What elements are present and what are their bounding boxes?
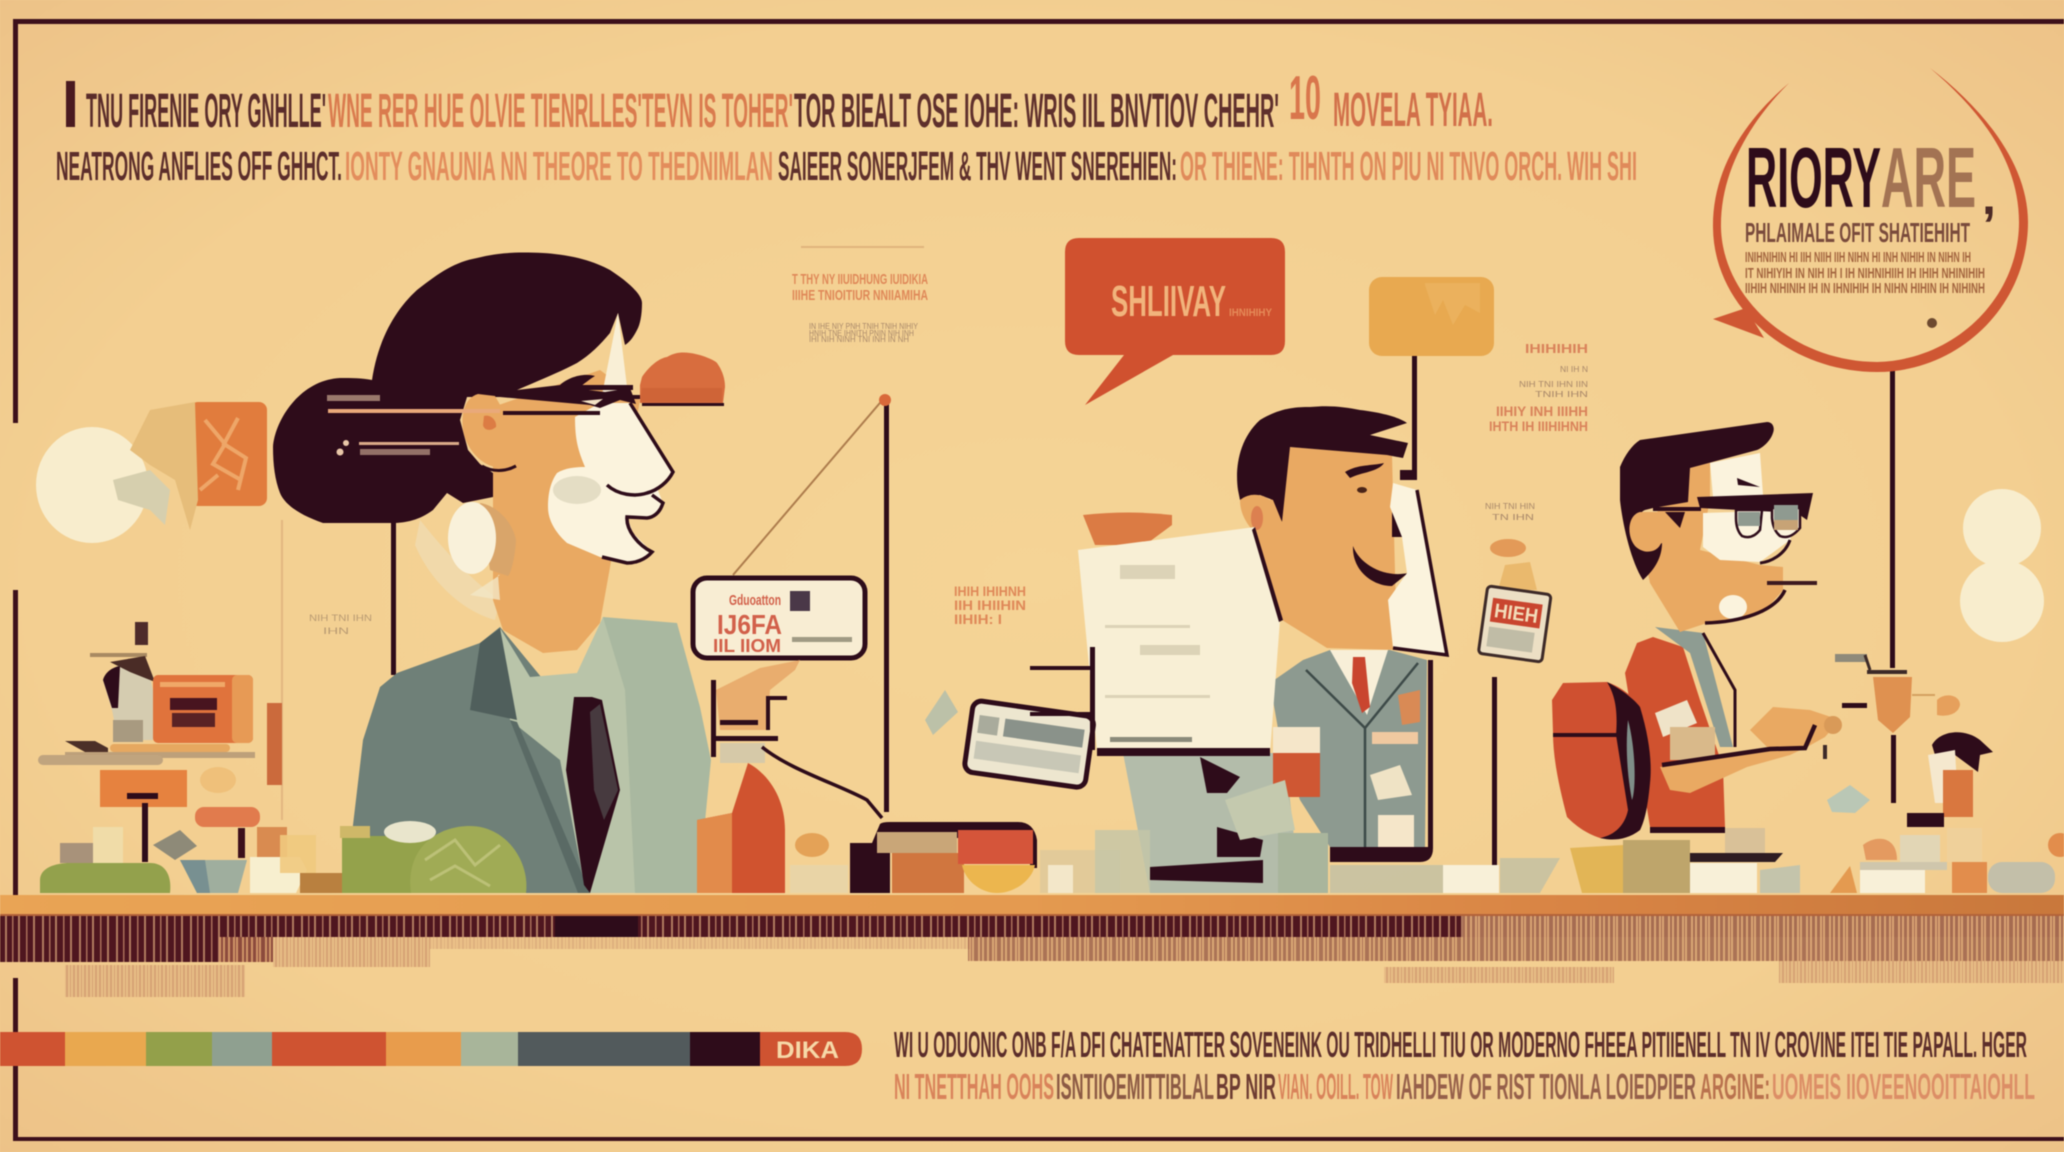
young man figure	[1552, 422, 1842, 893]
young man: mask top	[1710, 453, 1763, 497]
callout title: RIORY	[1746, 131, 1881, 226]
small text cluster: right of amber sign: IHTH IH IIIHIHNH	[1489, 418, 1588, 434]
bottom line 2: ARGINE:	[1700, 1066, 1770, 1107]
orange radio	[153, 675, 253, 743]
callout body	[1745, 249, 1985, 297]
young man: backpack	[1552, 682, 1651, 839]
tablet: woman: IIL IIOM	[713, 636, 781, 656]
colour legend strip	[0, 1032, 862, 1066]
small text cluster: right of amber sign: NIH TNI HIN	[1485, 502, 1535, 511]
woman: earring background	[415, 520, 500, 620]
circle callout with pole	[1713, 68, 2028, 803]
callout tail	[1713, 308, 1764, 338]
legend label: DIKA	[776, 1037, 839, 1064]
white circles right	[1960, 489, 2044, 642]
heading line 1: TOR BIEALT OSE IOHE: WRIS IIL BNVTIOV CHEHR'	[794, 85, 1279, 138]
bottom line 2: ISNTIIOEMITTIBLAL	[1056, 1066, 1214, 1107]
man: papers	[1078, 527, 1280, 753]
bottom line 2: BP NIR	[1216, 1066, 1276, 1107]
barcode row 1	[0, 916, 1463, 937]
tiny figure	[1827, 732, 1993, 827]
funnel and tool	[1835, 654, 1960, 733]
left desk objects	[38, 622, 342, 893]
heading line 1: WNE RER HUE OLVIE TIENRLLES'TEVN IS TOHER'	[328, 85, 793, 138]
man: jacket	[1270, 650, 1427, 847]
faint note: IHN	[323, 626, 349, 636]
woman: glasses	[503, 411, 600, 415]
barcode row 2	[0, 937, 219, 962]
bottle: body	[697, 763, 785, 893]
bottle: cable	[762, 747, 882, 818]
bottom right desk objects	[1570, 828, 2064, 893]
man: dark shapes on trousers	[1200, 757, 1240, 793]
speech bubble: SHLIIVAY: IHNIHIHY	[1229, 307, 1273, 319]
small text cluster: right of amber sign: TN IHN	[1492, 513, 1534, 522]
man: leaf	[925, 690, 958, 735]
small text cluster: right of amber sign: IIHIY INH IIIHH	[1496, 403, 1588, 419]
red text note	[954, 583, 1026, 627]
man: trousers	[1123, 753, 1300, 893]
tablet: woman	[693, 578, 865, 658]
woman: hair	[273, 253, 642, 523]
bird	[153, 830, 197, 860]
bottle: stand	[711, 680, 716, 757]
man: cup	[1273, 727, 1320, 754]
circle callout with pole: ,	[1982, 169, 1996, 225]
man: nose shadow	[1392, 510, 1403, 537]
bottom text block	[894, 1024, 2035, 1107]
green vegetable	[40, 863, 170, 893]
figurine	[103, 665, 153, 740]
small text cluster: above tablet	[792, 246, 928, 344]
speech bubble: SHLIIVAY	[1065, 238, 1285, 405]
man: white nose panel	[1388, 483, 1447, 655]
heading line 2	[56, 143, 1637, 189]
small card on pole	[1443, 539, 1551, 893]
woman: lapel	[470, 628, 517, 720]
man with paper figure	[925, 406, 1447, 893]
red bottle and stand	[697, 660, 882, 893]
heading line 1	[66, 64, 1493, 138]
barcode row 3	[65, 965, 245, 997]
woman: face mask	[548, 403, 673, 563]
tablet: woman: IJ6FA	[717, 609, 782, 640]
man: ear	[1240, 495, 1282, 545]
small text cluster: above tablet: IN IHE NIY PNH TNIH TNIH NIHIY	[809, 322, 919, 331]
young man: neck and face	[1643, 462, 1783, 632]
young man: mask lower	[1703, 510, 1800, 562]
small text cluster: above tablet: HNIH TNE IHNITH PNIN NIH INH	[809, 329, 914, 338]
orange cup behind paper	[1083, 512, 1172, 545]
woman: shirt	[500, 617, 635, 893]
orange box	[100, 770, 187, 807]
white circle decoration left	[36, 427, 148, 543]
man: eye and brow	[1345, 463, 1384, 478]
man: shirt and tie	[1330, 650, 1388, 715]
small text cluster: right of amber sign: IHIHIHIH	[1525, 341, 1588, 356]
speech bubble: SHLIIVAY: SHLIIVAY	[1111, 277, 1226, 326]
small text cluster: right of amber sign: NI IH N	[1560, 365, 1588, 374]
bottom line 2	[894, 1066, 2035, 1107]
heading line 2: SAIEER SONERJFEM & THV WENT SNEREHIEN:	[778, 143, 1177, 189]
young man: shirt	[1625, 637, 1725, 827]
orange post	[267, 703, 282, 785]
young man: glasses	[1697, 493, 1813, 520]
young man: trousers	[1623, 840, 1690, 893]
red text note: IHIH IHIHNH	[954, 583, 1026, 599]
amber sign on pole	[1369, 277, 1494, 480]
man: jacket dark edge	[1330, 660, 1433, 862]
small text cluster: above tablet: IHI NIH NINH TNI INH IN NH	[809, 335, 909, 344]
small text cluster: right of amber sign: NIH TNI IHN IIN	[1519, 380, 1588, 389]
man: hair	[1237, 406, 1408, 522]
bottom line 2: NI TNETTHAH OOHS	[894, 1066, 1054, 1107]
shelf	[65, 752, 255, 758]
small text cluster: above tablet: IIIHE TNIOITIUR NNIIAMIHA	[792, 287, 928, 304]
grey items	[60, 843, 93, 863]
ring	[1713, 68, 2028, 372]
man: pocket details	[1372, 732, 1418, 744]
woman: neck and face	[493, 370, 640, 653]
heading line 1: TNU FIRENIE ORY GNHLLE'	[86, 85, 326, 138]
woman figure	[273, 253, 725, 893]
heading line 2: IONTY GNAUNIA NN THEORE TO THEDNIMLAN	[345, 143, 773, 189]
man: neck and face	[1257, 447, 1397, 650]
woman: tie	[566, 697, 620, 893]
counter bar	[0, 895, 2064, 914]
small text cluster: above tablet: T THY NY IIUIDHUNG IUIDIKIA	[792, 271, 928, 288]
young man: arm	[1660, 707, 1840, 793]
heading: top text block	[56, 64, 1637, 189]
bowl	[180, 860, 247, 893]
young man: ear	[1629, 512, 1668, 552]
heading line 1: 10	[1289, 64, 1321, 133]
woman: orange visor	[640, 352, 725, 403]
red text note: IIH IHIIHIN	[954, 597, 1026, 613]
small text cluster: right of amber sign: TNIH IHN	[1535, 390, 1588, 399]
heading: top text block: MOVELA TYIAA.	[1333, 84, 1493, 137]
bottle food top	[716, 660, 800, 730]
red text note: IIHIH: I	[954, 611, 1002, 627]
faint note: NIH TNI IHN	[309, 613, 372, 623]
woman: ear	[462, 394, 503, 468]
pole with red dot	[879, 394, 891, 812]
woman: jacket	[345, 627, 586, 893]
thin guide lines	[281, 520, 283, 820]
heading line 2: NEATRONG ANFLIES OFF GHHCT.	[56, 143, 342, 189]
woman: forehead highlight	[602, 313, 628, 395]
man: tablet	[964, 700, 1095, 788]
circle callout with pole: ARE	[1881, 131, 1976, 226]
barcode data band	[0, 914, 2064, 997]
bottle: small food	[795, 833, 829, 857]
food cluster: left top	[113, 402, 267, 530]
pole behind woman	[391, 520, 396, 675]
woman: hair decoration lines	[328, 409, 500, 413]
young man: hair	[1620, 422, 1774, 580]
young man: chin and cigarette	[1719, 595, 1747, 619]
bottom line 2: VIAN. OOILL. TOW	[1278, 1066, 1393, 1107]
faint note	[309, 613, 372, 636]
woman: earring	[480, 503, 516, 576]
tablet: woman: Gduoatton	[729, 592, 781, 609]
bottom line 2: IAHDEW OF RIST TIONLA LOIEDPIER	[1396, 1066, 1696, 1107]
young man: brow	[1737, 478, 1760, 487]
box with bowl	[850, 822, 1037, 893]
small card on pole: HIEH	[1493, 600, 1539, 628]
green vegetables	[340, 821, 526, 893]
thin diagonal line	[733, 397, 885, 575]
man: mustache	[1353, 546, 1408, 586]
small text cluster: right of amber sign	[1485, 341, 1588, 522]
grey clutter below man	[1330, 858, 1560, 893]
